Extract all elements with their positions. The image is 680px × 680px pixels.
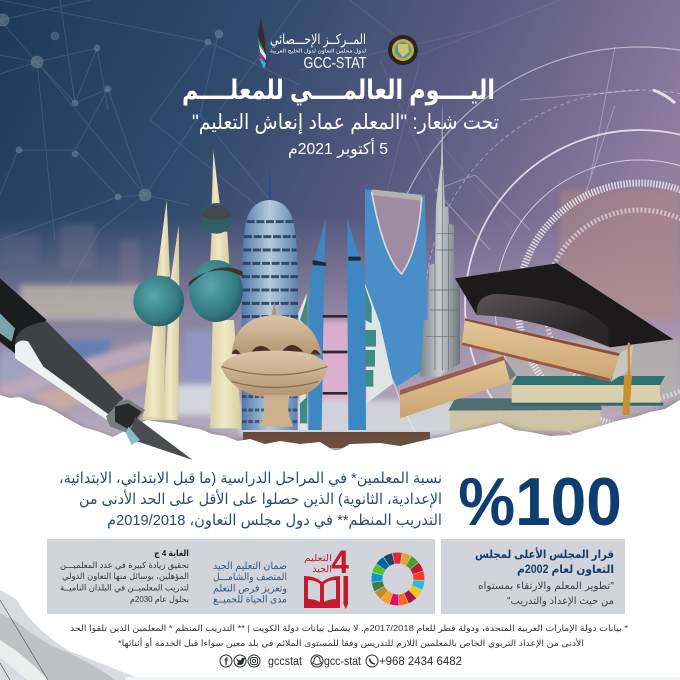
- logo: GCC-Stat wordmark: GCC-STAT: [304, 55, 367, 72]
- target 4.c text: الغاية 4 ج: [154, 548, 189, 559]
- lower stacked book: [448, 398, 602, 431]
- background tech rings: [382, 47, 680, 563]
- teal book: [510, 376, 665, 406]
- subtitle: theme: تحت شعار: "المعلم عماد إنعاش التعليم": [192, 111, 499, 135]
- torn paper edge: [0, 394, 680, 680]
- hero background: [0, 0, 680, 450]
- illustration: Gulf landmarks: [133, 100, 460, 430]
- phone number: +968 2434 6482: [379, 656, 462, 668]
- pen ring: [106, 399, 145, 433]
- goal 4 text: مدى الحياة للجميــع: [213, 594, 287, 606]
- icon: twitter: [234, 655, 246, 667]
- target 4.c text: [60, 548, 190, 604]
- handle: gcc-stat: gcc-stat: [324, 656, 362, 668]
- panel: GCC Supreme Council decision: من حيث الإعداد والتدريب": [507, 596, 614, 607]
- statistic description: التدريب المنظم** في دول مجلس التعاون، 2019/2018م: [107, 512, 442, 530]
- Bahrain World Trade Center: [298, 218, 393, 430]
- statistic description: نسبة المعلمين* في المراحل الدراسية (ما قبل الابتدائي، الابتدائية،: [59, 470, 442, 488]
- Burj Khalifa tower: [420, 100, 460, 377]
- Kingdom Centre tower: [365, 189, 428, 387]
- icon: SDG 4 quality education: الجيد: [312, 564, 332, 575]
- icon: whatsapp: [366, 655, 378, 667]
- goal 4 text: ضمان التعليم الجيد: [213, 561, 287, 572]
- open leaning book: [400, 356, 516, 418]
- logo: GCC-Stat wordmark: لدول مجلس التعاون لدول الخليج العربية: [270, 48, 366, 54]
- social media row: [220, 655, 462, 668]
- goal 4 text: المنصف والشامـــل: [213, 572, 287, 583]
- statistic description: [59, 470, 442, 530]
- icon: SDG 4 quality education: التعليم: [304, 553, 332, 564]
- footer swoosh: [0, 590, 680, 680]
- big statistic 100%: %100: [458, 463, 622, 539]
- logo: GCC-Stat ribbon: [258, 18, 267, 69]
- graduation cap: [455, 263, 673, 415]
- logo: GCC-Stat wordmark: المــركــز الإحـــصائي: [270, 31, 366, 48]
- panel: GCC Supreme Council decision: قرار المجلس الأعلى لمجلس: [475, 547, 614, 561]
- blurred city backdrop: [0, 190, 680, 450]
- pen grip: [15, 322, 123, 420]
- icon: facebook: [220, 655, 232, 668]
- background network of nodes: [0, 0, 560, 300]
- statistic description: الإعدادية، الثانوية) الذين حصلوا على الأقل على الحد الأدنى من: [79, 489, 442, 508]
- panel: GCC Supreme Council decision: [441, 539, 625, 614]
- goal 4 text: وتعزيز فرص التعلم: [213, 584, 287, 594]
- icon: instagram: [248, 655, 260, 667]
- icon: SDG 4 quality education: 4: [331, 544, 349, 580]
- icon: SDG colour wheel: [368, 549, 428, 609]
- target 4.c text: بحلول عام 2030م: [130, 594, 189, 604]
- handle: gccstat: gccstat: [268, 656, 303, 668]
- pen barrel: [0, 278, 47, 353]
- target 4.c text: تحقيق زيادة كبيرة في عدد المعلميـــن: [60, 560, 190, 570]
- panel: GCC Supreme Council decision: "تطوير المعلم والارتقاء بمستواه: [478, 581, 614, 592]
- panel: SDG 4: [47, 539, 435, 614]
- tilted top book: [462, 318, 633, 382]
- title: اليــــوم العالمــــي للمعلــــم: [182, 75, 495, 106]
- illustration: fountain pen: [0, 278, 193, 460]
- icon: facebook: f: [224, 657, 228, 668]
- footnotes: * بيانات دولة الإمارات العربية المتحدة، ودولة قطر للعام 2017/2018م. لا يشمل بيانات دولة الكويت | ** التدريب المنظم * المعلمين الذين تلقوا الحد: [70, 623, 629, 634]
- logo: GCC emblem: [388, 35, 418, 65]
- Kuwait Towers: [133, 150, 243, 428]
- illustration: books and graduation cap: [400, 263, 673, 431]
- footnotes: الأدنى من الإعداد التربوي الخاص بالمعلمين اللازم للتدريس وفقا للمستوى الملائم في بلد معين سواءا قبل الخدمة أو أثنائها*: [118, 637, 584, 649]
- goal 4 text: [213, 561, 287, 606]
- date: 5 أكتوبر 2021م: [288, 138, 388, 159]
- target 4.c text: المؤهلين، بوسائل منها التعاون الدولي: [62, 571, 189, 581]
- Aspire tower: [242, 165, 298, 430]
- pen nib: [128, 417, 193, 460]
- logo: GCC-Stat wordmark: [270, 31, 367, 72]
- monument base soil: [243, 432, 430, 448]
- target 4.c text: لتدريب المعلميــن في البلدان الناميــة: [60, 582, 189, 592]
- Omani incense burner monument: [221, 300, 328, 427]
- icon: snapchat: [311, 655, 323, 667]
- footnotes: [70, 623, 629, 649]
- icon: SDG 4 quality education: [304, 544, 349, 609]
- panel: GCC Supreme Council decision: التعاون لعام 2002م: [517, 564, 614, 577]
